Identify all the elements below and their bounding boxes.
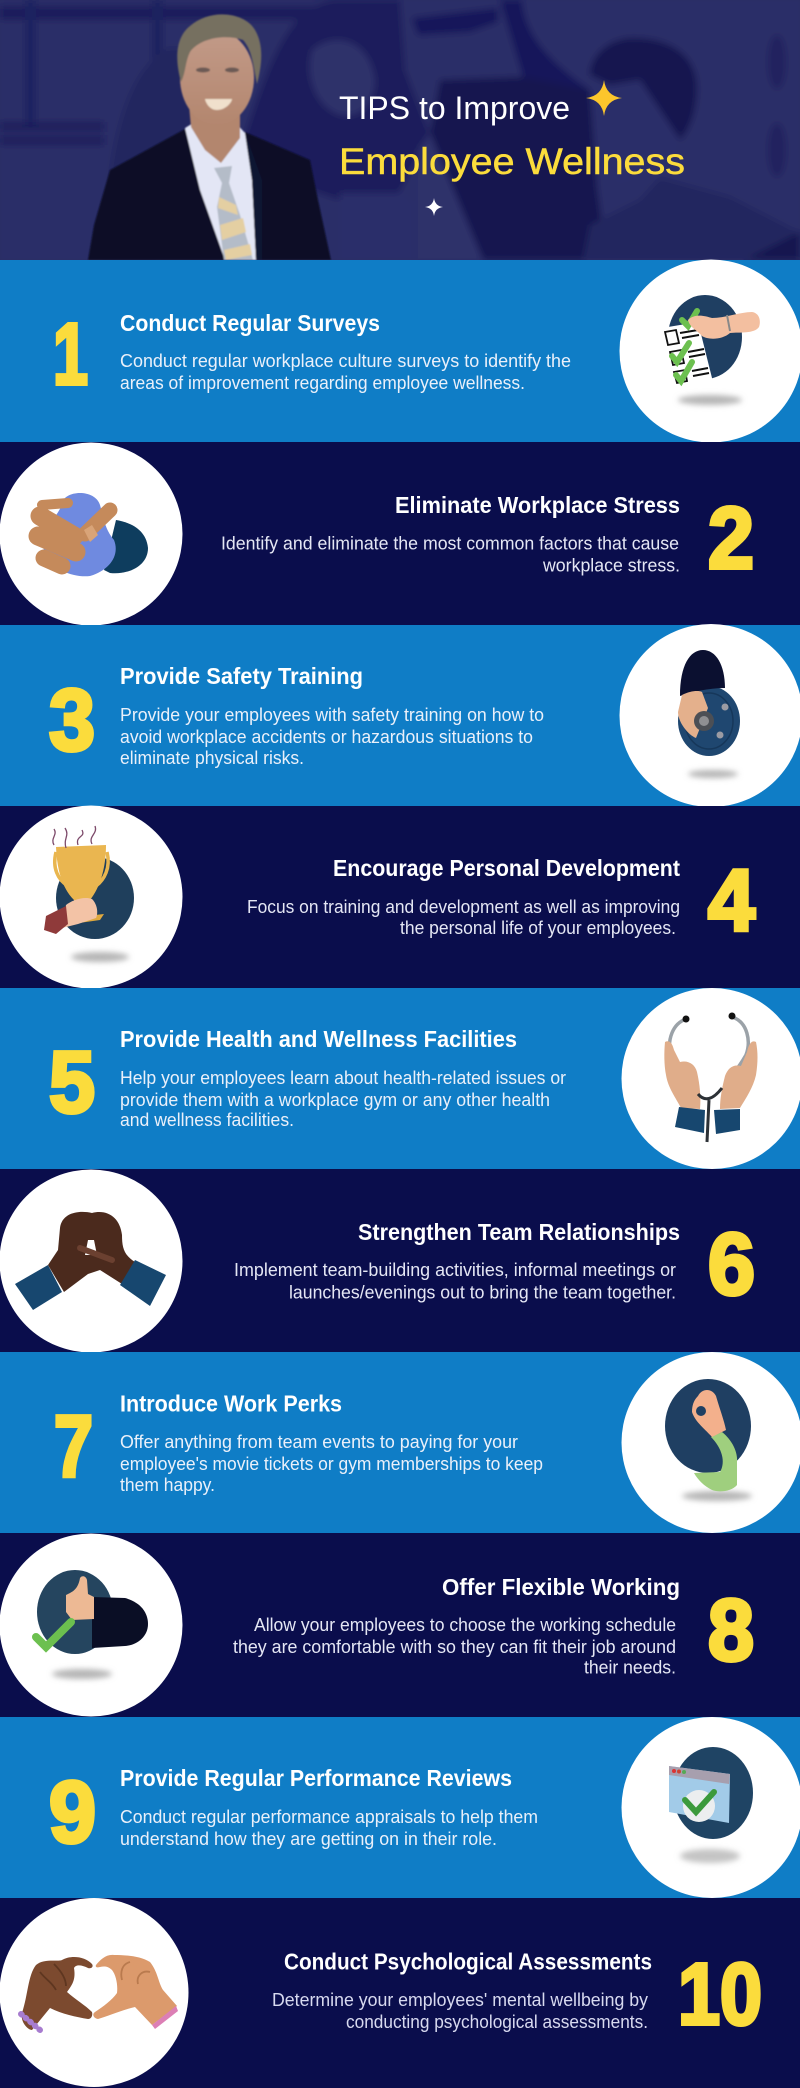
body text: Focus on training and development as well as improving [247,896,680,917]
heading: Conduct Psychological Assessments [284,1948,652,1974]
panel: tip 8: they are comfortable with so they can fit their job around [233,1636,676,1657]
panel: tip 6: launches/evenings out to bring the team together. [289,1282,676,1302]
body text: Implement team-building activities, informal meetings or [234,1259,676,1280]
number 8: 8 [708,1582,754,1679]
panel: tip 5: provide them with a workplace gym or any other health [120,1089,550,1110]
heading: Introduce Work Perks [120,1390,342,1416]
shirt [185,120,256,260]
body text: Conduct regular performance appraisals to help them [120,1806,538,1827]
heading line 1: TIPS to Improve [339,90,570,126]
number 4: 4 [708,852,755,949]
icon: trophy in hand [0,806,182,988]
jacket [88,127,331,260]
right lapel [245,132,262,260]
heading: Conduct Regular Surveys [120,310,380,336]
heading: Provide Regular Performance Reviews [120,1765,512,1791]
panel: tip 5: and wellness facilities. [120,1109,294,1130]
heading: Strengthen Team Relationships [358,1219,680,1245]
panel: tip 1 [0,260,800,442]
neck [189,105,240,163]
panel: tip 3: eliminate physical risks. [120,747,304,768]
body text: Conduct regular workplace culture surveys to identify the [120,350,571,371]
panel: tip 1: areas of improvement regarding employee wellness. [120,372,525,393]
panel: tip 8: their needs. [584,1656,676,1678]
icon: clasped hands [0,1170,182,1352]
panel: tip 6 [0,1169,800,1352]
body text: Offer anything from team events to paying for your [120,1431,518,1452]
body text: Help your employees learn about health-related issues or [120,1067,566,1088]
body text: Determine your employees' mental wellbeing by [272,1989,649,2010]
icon: hand on safety dial [620,624,800,807]
number 1: 1 [53,306,88,403]
panel: tip 7 [0,1352,800,1533]
number 6: 6 [708,1216,755,1313]
panel: tip 5 [0,988,800,1169]
icon: OK hand gesture [622,1352,800,1533]
heading line 2: Employee Wellness [339,141,685,182]
header photo background [0,0,800,265]
panel: tip 3 [0,624,800,807]
icon: stress ball in fist [0,442,182,626]
panel: tip 10 [0,1898,800,2088]
icon: approved browser window [622,1717,800,1898]
heading: Provide Health and Wellness Facilities [120,1026,517,1052]
body text: Provide your employees with safety training on how to [120,704,544,725]
heading: Encourage Personal Development [333,855,680,881]
panel: tip 2: workplace stress. [542,554,680,576]
body text: Identify and eliminate the most common factors that cause [221,532,679,554]
panel: tip 4: the personal life of your employees. [400,917,676,938]
number 9: 9 [49,1764,96,1861]
number 7: 7 [54,1398,93,1495]
icon: hands holding stethoscope [622,988,800,1169]
panel: tip 2 [0,442,800,626]
icon: yellow sparkle [586,80,622,116]
hair [177,14,261,84]
panel: tip 8 [0,1533,800,1717]
icon: hands forming heart [0,1898,188,2087]
panel: tip 7: employee's movie tickets or gym memberships to keep [120,1453,543,1474]
number 3: 3 [49,672,95,769]
number 5: 5 [49,1034,95,1131]
panel: tip 3: avoid workplace accidents or hazardous situations to [120,726,533,747]
photo: man in suit [88,14,331,260]
head [180,31,254,125]
panel: header [0,0,800,265]
icon: thumbs up [0,1534,182,1716]
icon: white sparkle [425,198,443,216]
heading: Eliminate Workplace Stress [395,492,680,518]
tie [214,166,253,260]
icon: survey checklist [620,260,800,442]
panel: tip 4 [0,806,800,988]
panel: tip 7: them happy. [120,1474,215,1495]
number 2: 2 [708,490,754,587]
panel: tip 9: understand how they are getting on in their role. [120,1828,497,1849]
panel: tip 9 [0,1717,800,1898]
heading: Provide Safety Training [120,663,363,689]
heading: Offer Flexible Working [442,1574,680,1600]
panel: tip 10: conducting psychological assessments. [346,2011,648,2032]
body text: Allow your employees to choose the working schedule [254,1614,676,1635]
number 10: 10 [678,1946,762,2043]
